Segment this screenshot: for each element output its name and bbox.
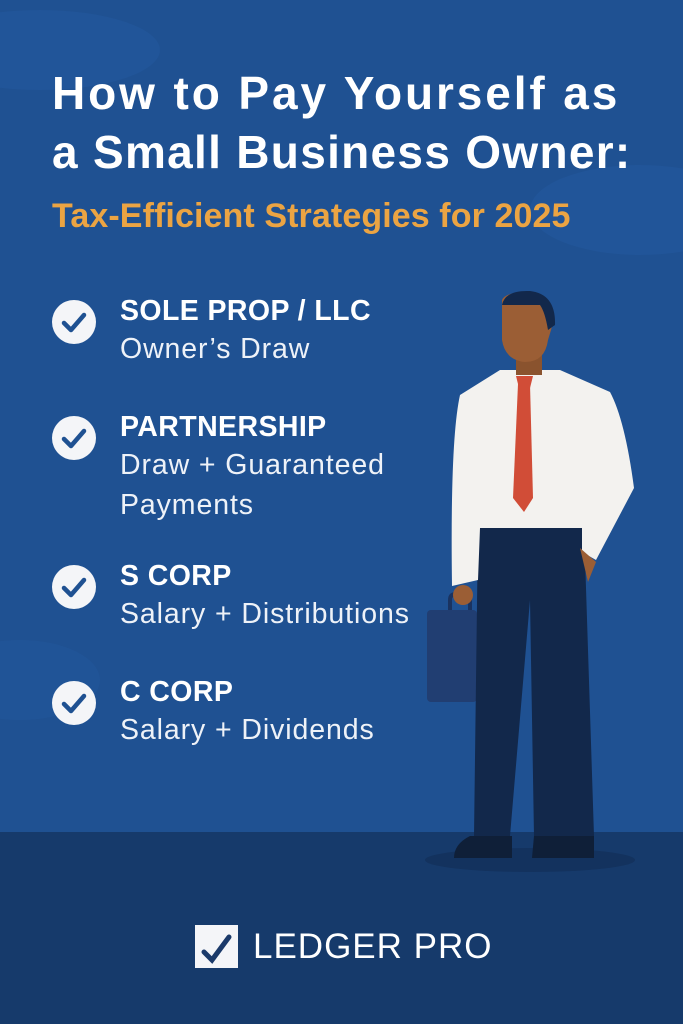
item: s corp: S CORP <box>120 560 232 592</box>
item: sole prop: SOLE PROP / LLC <box>120 295 371 327</box>
neck & head <box>516 350 542 375</box>
item: s corp: Salary + Distributions <box>120 598 410 630</box>
item: c corp: C CORP <box>120 676 233 708</box>
item: sole prop: Owner’s Draw <box>120 333 310 365</box>
tie <box>513 384 533 512</box>
title <box>52 67 632 235</box>
item: c corp <box>52 676 375 746</box>
item: sole prop <box>52 295 371 365</box>
briefcase <box>450 594 470 612</box>
shoes <box>454 836 512 858</box>
item: s corp <box>52 560 410 630</box>
legs <box>474 526 594 836</box>
title: a Small Business Owner: <box>52 126 632 178</box>
item: partnership <box>52 411 385 521</box>
title: How to Pay Yourself as <box>52 67 620 119</box>
logo: LEDGER PRO <box>253 927 492 966</box>
hands <box>453 585 473 605</box>
title: Tax-Efficient Strategies for 2025 <box>52 197 571 235</box>
item: partnership: Draw + Guaranteed <box>120 449 385 481</box>
item: partnership: Payments <box>120 489 254 521</box>
item: partnership: PARTNERSHIP <box>120 411 327 443</box>
item: c corp: Salary + Dividends <box>120 714 375 746</box>
shirt <box>452 370 634 586</box>
logo icon <box>195 925 238 968</box>
